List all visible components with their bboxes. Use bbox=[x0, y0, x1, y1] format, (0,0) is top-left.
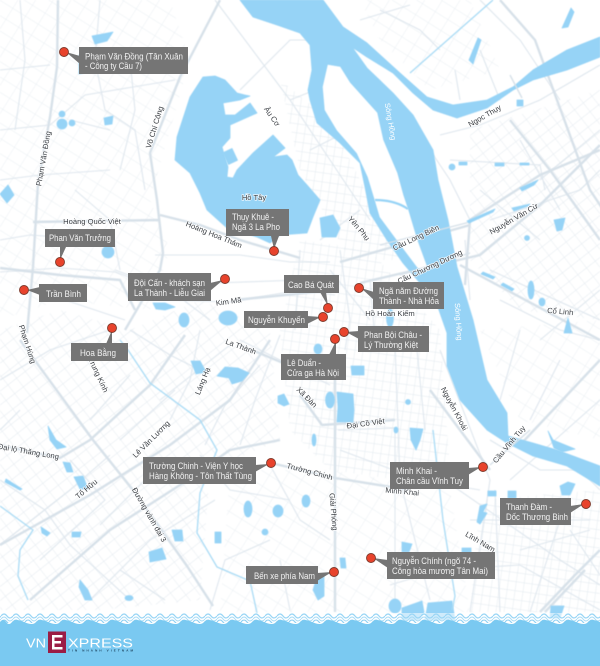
river labels: Sông Hồng bbox=[383, 102, 398, 141]
callout: Thụy Khuê bbox=[226, 209, 289, 256]
callout: Lê Duẩn bbox=[281, 334, 346, 380]
callout: Thanh Đàm bbox=[500, 498, 590, 525]
logo: VnExpress: VN bbox=[26, 636, 46, 650]
callout: Phạm Văn Đồng bbox=[60, 47, 188, 74]
callout: Lê Duẩn: Cửa ga Hà Nội bbox=[287, 367, 339, 378]
callout: Thanh Đàm: Thanh Đàm - bbox=[506, 501, 552, 512]
road labels: Trung Kính bbox=[86, 356, 110, 394]
road labels: Lê Văn Lương bbox=[131, 419, 172, 460]
callout: Trần Bình: Trần Bình bbox=[46, 288, 81, 299]
callout: Ngã năm Đường Thành: Ngã năm Đường bbox=[379, 285, 438, 296]
bridges over the river bbox=[380, 75, 530, 465]
callout: Minh Khai: Minh Khai - bbox=[396, 465, 437, 476]
logo: VnExpress: TIN NHANH VIETNAM bbox=[68, 648, 134, 652]
road labels: Hoàng Hoa Thám bbox=[185, 219, 243, 250]
callout: Đội Cấn bbox=[128, 273, 230, 301]
road labels: Cầu Long Biên bbox=[391, 223, 441, 252]
road labels: Phạm Hùng bbox=[17, 324, 38, 365]
callout: Hoa Bằng: Hoa Bằng bbox=[80, 347, 116, 358]
callout: Nguyễn Khuyến: Nguyễn Khuyến bbox=[248, 314, 305, 325]
callout: Minh Khai: Chân cầu Vĩnh Tuy bbox=[396, 475, 463, 486]
callout: Trường Chinh bbox=[143, 457, 276, 484]
road labels: Hồ Hoàn Kiếm bbox=[365, 309, 415, 318]
footer bbox=[0, 620, 600, 666]
road labels: Kim Mã bbox=[215, 295, 243, 308]
callout: Nguyễn Chính: Công hòa mương Tân Mai) bbox=[392, 565, 488, 576]
road labels: Lĩnh Nam bbox=[464, 530, 497, 554]
road labels: Cổ Linh bbox=[547, 306, 574, 317]
road labels: Cầu Vĩnh Tuy bbox=[491, 424, 527, 465]
callout: Phan Văn Trưởng bbox=[45, 229, 115, 266]
road labels: Yên Phụ bbox=[346, 214, 372, 242]
callout: Cao Bá Quát: Cao Bá Quát bbox=[288, 279, 334, 290]
footer wave band bbox=[0, 613, 600, 623]
road labels: Hồ Tây bbox=[242, 193, 266, 202]
callout: Phạm Văn Đồng: - Công ty Cầu 7) bbox=[85, 60, 142, 71]
callout: Thụy Khuê: Ngã 3 La Pho bbox=[232, 221, 280, 232]
callout: Bến xe phía Nam: Bến xe phía Nam bbox=[254, 570, 315, 581]
road labels bbox=[0, 103, 574, 554]
callout: Phan Bội Châu bbox=[340, 326, 429, 352]
callout: Trần Bình bbox=[20, 284, 87, 302]
road labels: Ngọc Thụy bbox=[467, 103, 503, 129]
road labels: Giải Phóng bbox=[327, 493, 340, 531]
river: Sông Hồng bbox=[240, 0, 600, 486]
road labels: Đại Cồ Việt bbox=[346, 416, 386, 431]
callout: Minh Khai bbox=[390, 462, 488, 489]
logo: VnExpress bbox=[26, 632, 134, 653]
road labels: Võ Chí Công bbox=[144, 105, 165, 149]
callout: Hoa Bằng bbox=[71, 324, 128, 361]
logo: VnExpress: XPRESS bbox=[68, 636, 133, 650]
callout: Phạm Văn Đồng: Phạm Văn Đồng (Tân Xuân bbox=[85, 50, 183, 62]
callout: Cao Bá Quát bbox=[284, 275, 339, 312]
callout: Phan Bội Châu: Lý Thường Kiệt bbox=[364, 339, 418, 350]
callout: Nguyễn Chính: Nguyễn Chính (ngõ 74 - bbox=[392, 555, 476, 566]
callout: Nguyễn Chính bbox=[366, 552, 495, 579]
road labels: Trường Chinh bbox=[286, 461, 334, 482]
callout: Ngã năm Đường Thành: Thành - Nhà Hỏa bbox=[379, 295, 440, 306]
lake: Hồ Tây bbox=[175, 76, 320, 243]
callout: Lê Duẩn: Lê Duẩn - bbox=[287, 357, 321, 368]
road labels: Xã Đàn bbox=[295, 385, 319, 409]
river side channels bbox=[375, 200, 408, 209]
road labels: Đường vành đai 3 bbox=[130, 486, 168, 543]
road labels: Minh Khai bbox=[385, 486, 420, 497]
callout: Phan Bội Châu: Phan Bội Châu - bbox=[364, 329, 422, 340]
road labels: Cầu Chương Dương bbox=[396, 248, 464, 286]
river island: Bãi giữa bbox=[323, 65, 428, 270]
callout: Đội Cấn: La Thành - Liễu Giai bbox=[134, 287, 205, 298]
river labels bbox=[383, 102, 464, 341]
road labels: Âu Cơ bbox=[262, 105, 282, 128]
callout: Thanh Đàm: Dốc Thương Binh bbox=[506, 511, 568, 522]
road labels: Nguyễn Văn Cừ bbox=[488, 201, 540, 236]
road labels: Nguyễn Khoái bbox=[439, 386, 470, 432]
callout: Thụy Khuê: Thụy Khuê - bbox=[232, 211, 274, 222]
road labels: La Thành bbox=[224, 337, 257, 356]
callout: Đội Cấn: Đội Cấn - khách sạn bbox=[134, 277, 205, 288]
callout: Trường Chinh: Trường Chinh - Viện Y học bbox=[149, 460, 243, 471]
road labels: Phạm Văn Đồng bbox=[34, 130, 53, 187]
callout: Nguyễn Khuyến bbox=[244, 311, 328, 328]
road labels: Láng Hạ bbox=[193, 365, 213, 396]
callout: Trường Chinh: Hàng Không - Tôn Thất Tùng bbox=[149, 470, 252, 481]
callout: Ngã năm Đường Thành bbox=[354, 282, 444, 309]
river labels: Sông Hồng bbox=[453, 303, 464, 341]
canals bbox=[0, 0, 493, 613]
callout: Phan Văn Trưởng: Phan Văn Trưởng bbox=[49, 232, 111, 243]
road labels: Hoàng Quốc Việt bbox=[63, 217, 122, 226]
callout: Bến xe phía Nam bbox=[246, 566, 338, 584]
lake: Trúc Bạch bbox=[320, 215, 340, 237]
road labels: Tố Hữu bbox=[74, 477, 99, 501]
